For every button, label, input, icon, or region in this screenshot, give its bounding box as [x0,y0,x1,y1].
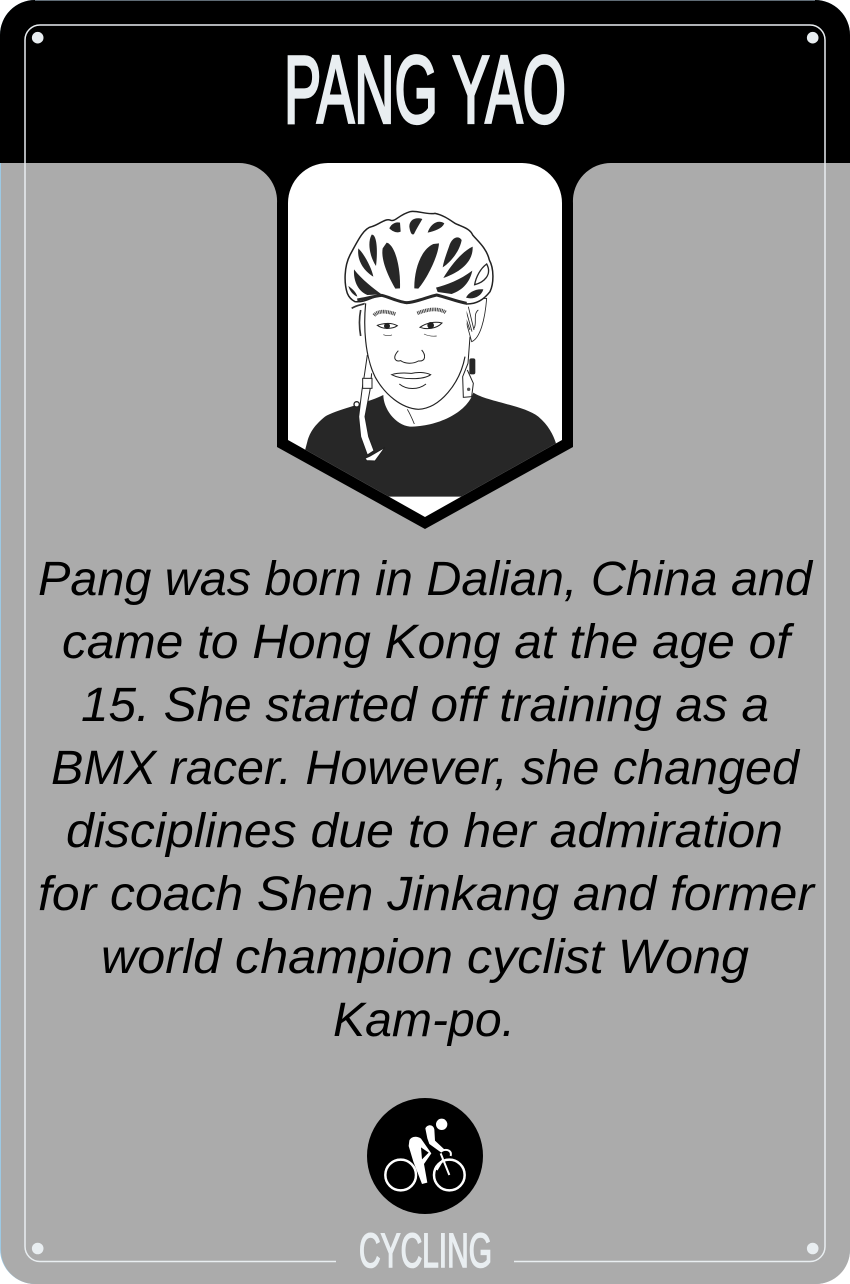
rider head [436,1119,447,1130]
nose [395,350,425,363]
eyebrows [374,309,446,315]
badge white interior [288,163,562,517]
face [364,300,467,424]
helmet vents [348,218,489,298]
biography text: world champion cyclist Wong [101,931,749,984]
biography text [38,553,816,1047]
mouth [392,372,431,388]
bike frame and handlebar [437,1150,451,1175]
eyes [377,322,442,329]
sport label: CYCLING [359,1225,492,1278]
shirt [303,393,570,497]
portrait illustration [303,211,570,497]
biography text: 15. She started off training as a [81,679,769,732]
portrait badge [288,163,570,517]
bicycle wheels [385,1160,465,1190]
helmet shell [345,211,493,304]
left strap [354,355,385,461]
biography text: BMX racer. However, she changed [51,742,800,795]
rider body [409,1137,431,1184]
biography text: Kam-po. [333,994,515,1047]
helmet brim [357,295,467,303]
neck detail [407,409,414,424]
ear and hair [352,298,487,342]
biography text: disciplines due to her admiration [66,805,783,858]
icon: cyclist [367,1098,483,1214]
title: PANG YAO [284,36,566,144]
biography text: came to Hong Kong at the age of [62,616,795,669]
biography text: for coach Shen Jinkang and former [38,868,816,921]
right strap [463,337,475,397]
biography text: Pang was born in Dalian, China and [38,553,813,606]
rider arm [425,1125,445,1153]
